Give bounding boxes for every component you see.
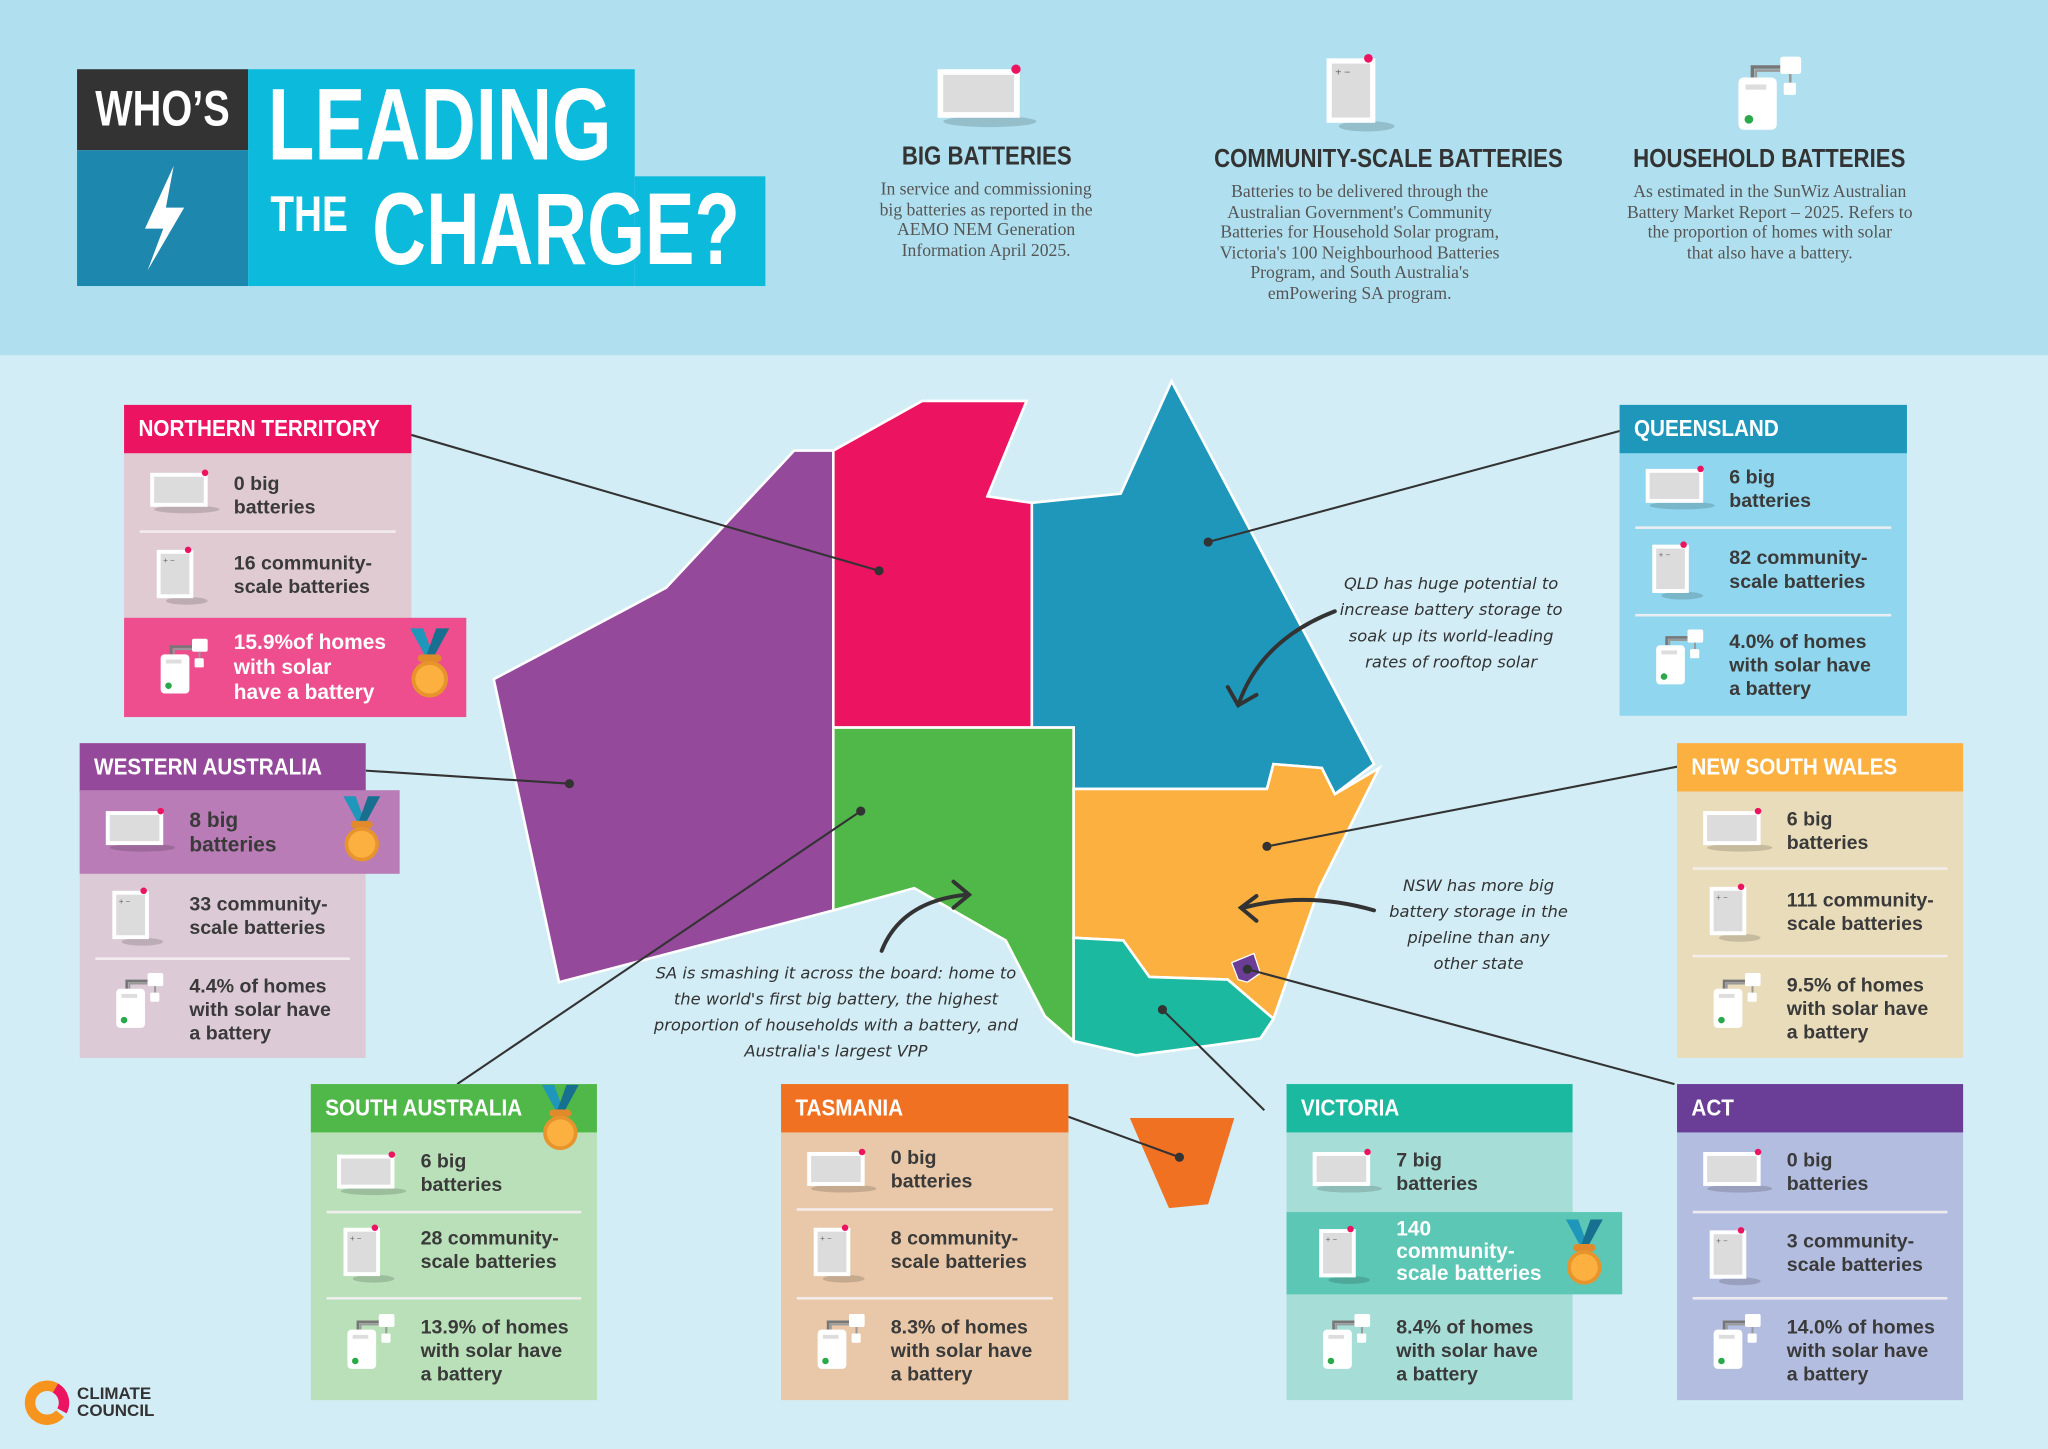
panel: Tasmania — [781, 1084, 1068, 1400]
panel: New South Wales: a battery — [1787, 1021, 1868, 1044]
logo: Climate Council — [24, 1380, 154, 1425]
panel: South Australia — [311, 1084, 597, 1400]
title: THE — [270, 188, 348, 243]
panel: Tasmania: scale batteries — [891, 1251, 1027, 1273]
legend: community batteries: Batteries for Household Solar program, — [1220, 222, 1499, 242]
panel: Western Australia — [80, 743, 366, 1058]
legend: big batteries — [880, 64, 1093, 260]
panel: Victoria: community- — [1396, 1241, 1515, 1263]
panel: Victoria: 140 — [1396, 1219, 1431, 1241]
panel: South Australia: scale batteries — [421, 1251, 557, 1273]
panel: Tasmania: 0 big — [891, 1147, 937, 1169]
panel: New South Wales — [1677, 743, 1963, 1058]
legend: community batteries: COMMUNITY-SCALE BATTERIES — [1214, 145, 1563, 174]
legend: household batteries: HOUSEHOLD BATTERIES — [1634, 145, 1906, 174]
legend: household batteries: As estimated in the SunWiz Australian — [1633, 182, 1906, 201]
logo: Climate Council: COUNCIL — [77, 1400, 154, 1420]
legend: big batteries: BIG BATTERIES — [901, 142, 1071, 171]
legend: big batteries: In service and commissioning — [881, 179, 1092, 199]
panel: Tasmania: with solar have — [891, 1340, 1032, 1362]
panel: ACT: ACT — [1691, 1095, 1734, 1121]
panel: Victoria — [1287, 1084, 1573, 1400]
panel: South Australia: a battery — [421, 1364, 502, 1386]
title: CHARGE? — [372, 171, 740, 286]
annotation: SA: SA is smashing it across the board: home to the world's first big battery, the highest proportion of households with a battery, and Australia's largest VPP — [654, 963, 1018, 1061]
panel: Victoria: batteries — [1396, 1173, 1478, 1195]
panel: Queensland: scale batteries — [1729, 571, 1865, 593]
panel: Tasmania: 8.3% of homes — [891, 1317, 1028, 1339]
leader lines — [366, 431, 1677, 1157]
panel: Northern Territory: with solar — [234, 657, 331, 679]
panel: South Australia: SOUTH AUSTRALIA — [325, 1095, 522, 1121]
panel: New South Wales: 6 big — [1787, 808, 1833, 831]
panel: Queensland: QUEENSLAND — [1634, 415, 1779, 441]
annotation: QLD: QLD has huge potential to increase battery storage to soak up its world-leading rates of rooftop solar — [1340, 573, 1562, 671]
panel: South Australia: 28 community- — [421, 1228, 559, 1250]
legend: community batteries: Victoria's 100 Neighbourhood Batteries — [1220, 242, 1500, 262]
panel: Victoria: with solar have — [1396, 1340, 1538, 1362]
panel: New South Wales: 9.5% of homes — [1787, 974, 1924, 997]
panel: ACT: 14.0% of homes — [1787, 1317, 1935, 1339]
panel: Western Australia: a battery — [189, 1023, 271, 1045]
panel: ACT: scale batteries — [1787, 1254, 1923, 1276]
legend: community batteries: Australian Government's Community — [1227, 202, 1492, 221]
title: LEADING — [268, 67, 612, 182]
panel: New South Wales: batteries — [1787, 832, 1868, 854]
panel: New South Wales: NEW SOUTH WALES — [1691, 754, 1897, 780]
panel: Northern Territory: scale batteries — [234, 576, 370, 598]
panel: South Australia: with solar have — [421, 1340, 562, 1362]
panel: Queensland: batteries — [1729, 490, 1811, 512]
panel: Queensland — [1620, 405, 1907, 716]
panel: ACT — [1677, 1084, 1963, 1400]
panel: South Australia: 6 big — [421, 1151, 466, 1173]
legend: big batteries: AEMO NEM Generation — [897, 219, 1075, 239]
panel: Tasmania: a battery — [891, 1364, 972, 1386]
panel: Queensland: 4.0% of homes — [1729, 631, 1866, 653]
title — [77, 67, 766, 286]
panel: Queensland: 82 community- — [1729, 547, 1868, 569]
panel: ACT: 3 community- — [1787, 1230, 1914, 1253]
panel: Northern Territory: batteries — [234, 496, 315, 519]
legend: community batteries: emPowering SA program. — [1268, 283, 1452, 302]
legend: household batteries: Battery Market Report – 2025. Refers to — [1627, 202, 1913, 221]
legend: community batteries — [1214, 54, 1563, 303]
panel: Tasmania: TASMANIA — [795, 1095, 903, 1121]
panel: Tasmania: batteries — [891, 1170, 972, 1192]
panel: Western Australia: WESTERN AUSTRALIA — [94, 754, 322, 780]
panel: ACT: batteries — [1787, 1173, 1868, 1195]
panel: Western Australia: 33 community- — [189, 893, 328, 916]
panel: Queensland: with solar have — [1729, 654, 1871, 677]
panel: ACT: with solar have — [1787, 1340, 1928, 1362]
legend: community batteries: Batteries to be delivered through the — [1231, 182, 1488, 201]
annotation: NSW: NSW has more big battery storage in the pipeline than any other state — [1389, 875, 1568, 973]
panel: ACT: a battery — [1787, 1364, 1868, 1386]
panel: Victoria: 7 big — [1396, 1149, 1442, 1172]
panel: Northern Territory: 0 big — [234, 473, 280, 495]
panel: New South Wales: scale batteries — [1787, 913, 1923, 935]
panel: ACT: 0 big — [1787, 1149, 1833, 1172]
panel: Western Australia: with solar have — [189, 999, 331, 1021]
panel: Northern Territory: have a battery — [234, 682, 374, 704]
top band background — [0, 0, 2048, 355]
icon: lightning — [145, 166, 184, 270]
panel: Northern Territory: 16 community- — [234, 552, 372, 575]
panel: Northern Territory: NORTHERN TERRITORY — [138, 415, 380, 441]
legend: big batteries: Information April 2025. — [902, 240, 1071, 259]
panel: Northern Territory: 15.9%of homes — [234, 632, 386, 654]
legend: household batteries — [1627, 56, 1913, 262]
panel: Victoria: VICTORIA — [1301, 1095, 1399, 1121]
panel: Tasmania: 8 community- — [891, 1228, 1018, 1250]
legend: big batteries: big batteries as reported in the — [880, 199, 1093, 219]
legend: household batteries: the proportion of homes with solar — [1648, 222, 1892, 242]
panel: Queensland: 6 big — [1729, 466, 1775, 488]
panel: Western Australia: batteries — [189, 835, 277, 857]
legend: community batteries: Program, and South Australia's — [1250, 263, 1469, 282]
legend: household batteries: that also have a battery. — [1687, 242, 1853, 262]
panel: South Australia: batteries — [421, 1174, 502, 1196]
panel: Victoria: a battery — [1396, 1364, 1478, 1386]
panel: Western Australia: 8 big — [189, 810, 238, 832]
panel: South Australia: 13.9% of homes — [421, 1317, 569, 1339]
panel: Western Australia: scale batteries — [189, 917, 326, 939]
arrows — [882, 611, 1374, 951]
panel: Victoria: 8.4% of homes — [1396, 1317, 1533, 1339]
panel: Victoria: scale batteries — [1396, 1263, 1541, 1285]
panel: Northern Territory — [124, 405, 411, 717]
panel: Western Australia: 4.4% of homes — [189, 976, 327, 998]
panel: New South Wales: 111 community- — [1787, 889, 1934, 912]
logo: Climate Council: CLIMATE — [77, 1383, 151, 1403]
panel: New South Wales: with solar have — [1787, 998, 1928, 1020]
panel: Queensland: a battery — [1729, 678, 1811, 700]
title: WHO’S — [95, 82, 230, 137]
